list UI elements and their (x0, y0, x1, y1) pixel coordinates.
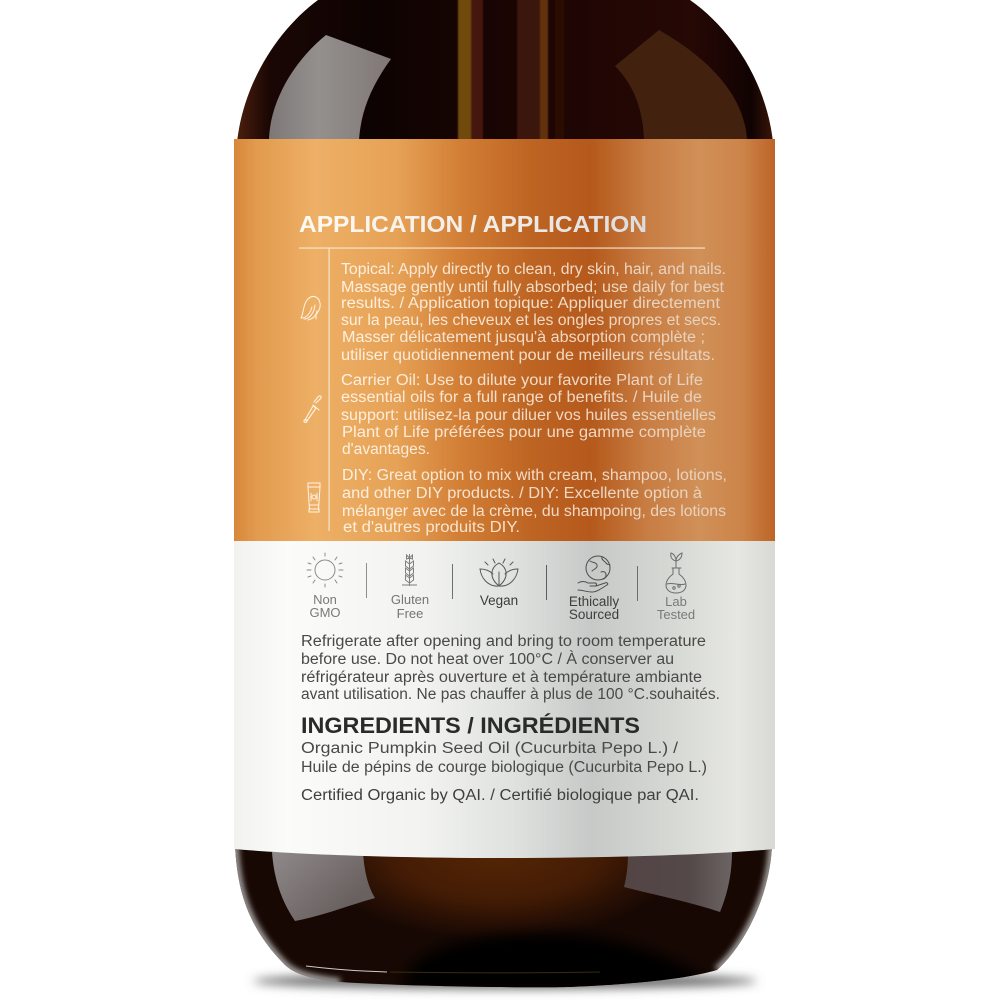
heading: ingredients: INGREDIENTS / INGRÉDIENTS (301, 713, 640, 738)
base olive rim line (390, 972, 600, 974)
text block: topical: Massage gently until fully absorbed; use daily for best (341, 279, 725, 296)
label: white information panel (234, 541, 775, 858)
label: vegan: Vegan (480, 593, 518, 608)
label: ethically sourced: Sourced (569, 607, 619, 622)
separator (546, 565, 547, 600)
separator (637, 566, 638, 601)
heading rule (299, 248, 705, 249)
icon: lotus (vegan) (480, 559, 518, 586)
icon: tube (308, 483, 320, 512)
label: gluten free: Free (397, 606, 423, 621)
ground shadow (253, 973, 757, 989)
text block: diy: and other DIY products. / DIY: Excellente option à (342, 485, 702, 502)
label: ethically sourced: Ethically (569, 594, 619, 609)
right glass reflection (615, 30, 747, 140)
text block: diy (342, 467, 727, 536)
text block: diy: DIY: Great option to mix with cream, shampoo, lotions, (342, 467, 727, 484)
icon: globe in hand (ethically sourced) (578, 556, 610, 592)
central amber glow (362, 856, 645, 931)
label: lab tested: Lab (665, 594, 687, 609)
label: non GMO: GMO (309, 605, 341, 620)
icon: dropper (304, 396, 321, 422)
side bevel light (235, 845, 772, 982)
label: lab tested (657, 594, 695, 622)
bottle shoulder (top glass) (237, 0, 773, 142)
text block: carrier oil: Plant of Life préférées pour une gamme complète (342, 424, 706, 441)
text block: topical (341, 261, 726, 364)
label: ethically sourced (569, 594, 619, 622)
text block: topical: Topical: Apply directly to clean, dry skin, hair, and nails. (341, 261, 726, 278)
label: gluten free: Gluten (391, 592, 429, 607)
text block: storage instructions: réfrigérateur après ouverture et à température ambiante (301, 669, 702, 686)
right base reflection (624, 852, 732, 912)
text block: diy: mélanger avec de la crème, du shampoing, des lotions (342, 503, 726, 520)
bottle base (bottom glass) (235, 849, 772, 988)
text block: ingredients: Huile de pépins de courge biologique (Cucurbita Pepo L.) (301, 759, 707, 776)
left glass reflection (269, 35, 391, 140)
label: orange application panel (234, 139, 775, 542)
text block: storage instructions (301, 633, 720, 703)
separator (366, 563, 367, 598)
icon: hair (301, 296, 320, 320)
text block: ingredients (301, 740, 707, 776)
text block: carrier oil (341, 372, 716, 458)
heading: application: APPLICATION / APPLICATION (299, 211, 647, 237)
base rim highlight (306, 966, 387, 972)
amber liquid streaks (458, 0, 564, 140)
label: gluten free (391, 592, 429, 621)
text block: diy: et d'autres produits DIY. (343, 519, 520, 536)
text block: storage instructions: avant utilisation. Ne pas chauffer à plus de 100 °C.souhaités. (301, 686, 720, 703)
text block: certification: Certified Organic by QAI. / Certifié biologique par QAI. (301, 787, 699, 804)
text block: topical: utiliser quotidiennement pour de meilleurs résultats. (341, 347, 715, 364)
text block: topical: results. / Application topique: Appliquer directement (341, 295, 721, 312)
text block: carrier oil: essential oils for a full range of benefits. / Huile de (341, 389, 702, 406)
left base reflection (272, 852, 375, 921)
text block: storage instructions: before use. Do not heat over 100°C / À conserver au (301, 651, 674, 668)
icon: wheat (gluten free) (402, 554, 417, 586)
vertical rule (328, 248, 330, 531)
text block: carrier oil: support: utilisez-la pour diluer vos huiles essentielles (341, 407, 716, 424)
text block: storage instructions: Refrigerate after opening and bring to room temperature (301, 633, 706, 650)
dark base pool (400, 934, 705, 990)
text block: topical: Masser délicatement jusqu'à absorption complète ; (342, 329, 705, 346)
text block: carrier oil: d'avantages. (342, 441, 430, 458)
icon: flask with sprout (lab tested) (666, 553, 686, 593)
text block: carrier oil: Carrier Oil: Use to dilute your favorite Plant of Life (341, 372, 703, 389)
icon: sun (non GMO) (307, 553, 343, 587)
label: non GMO (309, 592, 341, 620)
text block: ingredients: Organic Pumpkin Seed Oil (Cucurbita Pepo L.) / (301, 740, 679, 757)
label: lab tested: Tested (657, 607, 695, 622)
text block: topical: sur la peau, les cheveux et les ongles propres et secs. (341, 312, 721, 329)
separator (452, 564, 453, 599)
label: non GMO: Non (313, 592, 337, 607)
